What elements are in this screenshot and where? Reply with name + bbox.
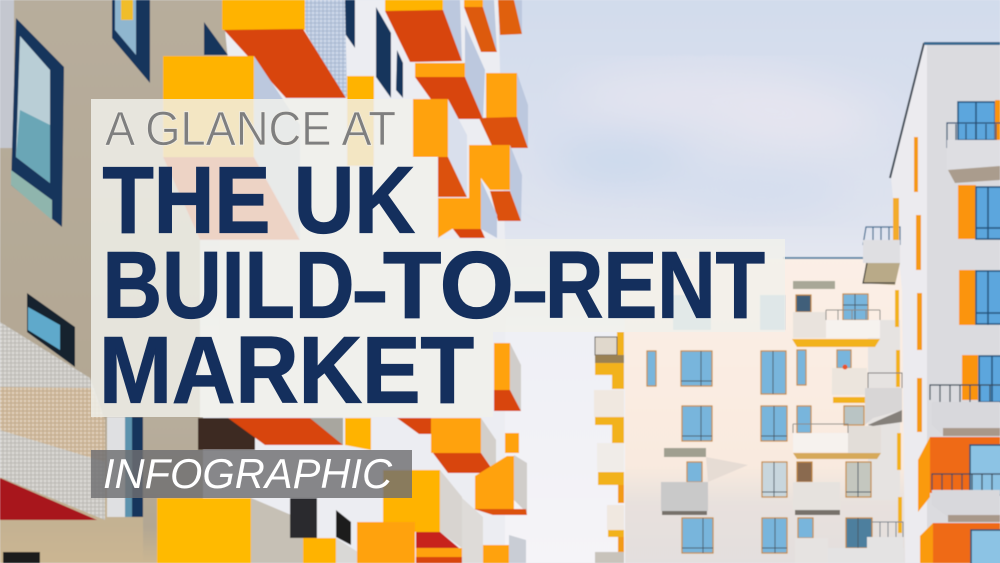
balcony 9 — [469, 145, 522, 221]
window: upper left — [11, 18, 64, 227]
small yellow balconies — [303, 510, 415, 563]
title line 1: THE UK — [102, 147, 415, 253]
small balconies at left of centre building — [594, 332, 624, 563]
balcony on tower side — [863, 227, 900, 285]
heading: a glance at: A GLANCE AT — [105, 103, 396, 156]
balcony 1 — [222, 0, 347, 98]
balcony — [462, 498, 526, 563]
right tower — [863, 42, 1000, 563]
balcony — [431, 418, 496, 473]
middle balcony — [930, 385, 1000, 436]
roof edge — [890, 43, 924, 178]
windows: central facade — [204, 0, 403, 98]
window mullions — [681, 294, 871, 553]
orange wall section 2 — [920, 523, 1000, 563]
yellow strip — [893, 198, 899, 240]
balcony 3 — [385, 0, 462, 62]
side-wall orange slits — [914, 137, 922, 432]
title line 2: - — [350, 237, 390, 343]
side strips of yellow — [895, 290, 902, 533]
balcony 5 — [464, 0, 497, 52]
window: lower left — [27, 293, 75, 367]
large yellow balcony — [157, 498, 303, 563]
balcony 10 — [438, 180, 497, 238]
tower side wall — [891, 43, 932, 563]
translucent infographic label panel — [91, 450, 412, 498]
balcony — [474, 455, 527, 515]
label: infographic: INFOGRAPHIC — [103, 450, 393, 497]
centre apartment building — [625, 257, 905, 563]
balcony — [397, 418, 465, 434]
windows behind title panel — [673, 295, 785, 330]
windows — [647, 294, 872, 553]
translucent title panel — [91, 99, 785, 417]
perforated balcony with red underside — [0, 322, 105, 520]
title line 2: RENT — [545, 233, 765, 339]
title line 2: - — [510, 237, 550, 343]
window: top left — [112, 0, 150, 83]
title line 2: BUILD — [102, 233, 354, 339]
title: the uk build-to-rent market — [99, 147, 765, 424]
orange wall section 1 — [918, 437, 1000, 512]
tower front wall — [927, 43, 1000, 563]
lower balcony — [932, 490, 1000, 522]
lower balconies — [157, 343, 527, 563]
balcony 8 — [413, 99, 467, 197]
upper balconies — [163, 0, 528, 240]
upper balcony — [947, 123, 1000, 183]
balcony 6 — [498, 0, 522, 35]
title line 2: TO — [383, 233, 514, 339]
balcony E with awning — [661, 448, 748, 515]
balcony — [383, 470, 470, 563]
balcony 7 — [479, 73, 528, 148]
balcony 4 — [415, 25, 485, 119]
balcony C — [793, 424, 881, 459]
window: beside perforated balcony — [107, 417, 143, 517]
balcony 2 — [163, 56, 300, 240]
balcony F — [795, 522, 904, 563]
window mullions — [976, 102, 1000, 402]
balcony: red soffit — [228, 418, 371, 450]
title line 3: MARKET — [99, 318, 474, 424]
left building facade — [0, 0, 528, 563]
orange panels — [958, 185, 978, 400]
balcony B — [832, 364, 867, 403]
balcony — [494, 343, 521, 411]
windows — [958, 102, 1000, 402]
balcony A — [792, 281, 880, 347]
balcony D — [793, 482, 840, 515]
balcony on tower side 2 — [865, 373, 902, 426]
